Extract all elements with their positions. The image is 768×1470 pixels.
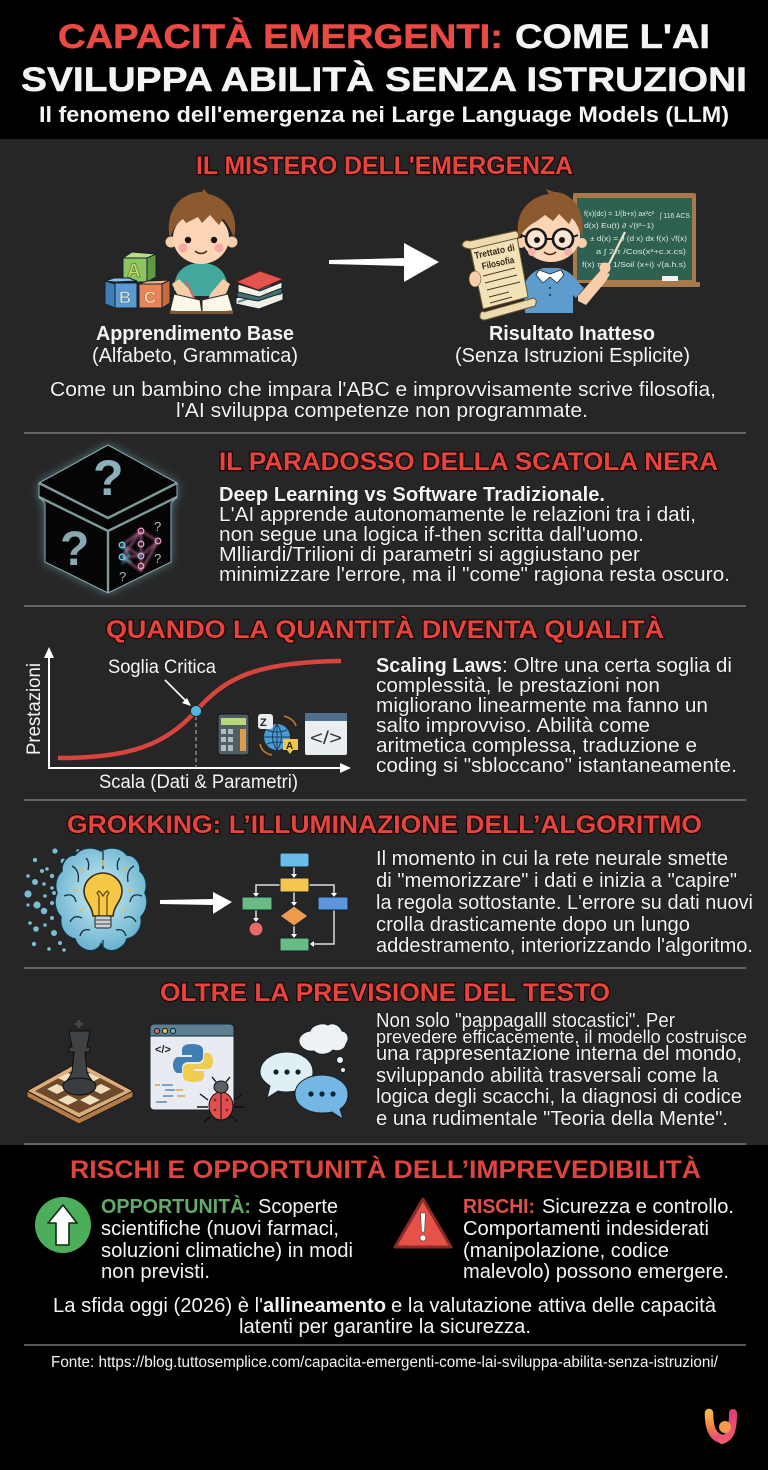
text block: [376, 847, 753, 957]
panel: grokking: [24, 811, 753, 957]
illustration: chalkboard teacher with scroll: f(x) π = 1/Soil (x+i) √(a.h.s): [582, 261, 686, 269]
icon: warning triangle: [395, 1199, 451, 1247]
illustration: chalkboard teacher with scroll: Trettato di: [473, 242, 516, 262]
arrow head: [182, 698, 191, 706]
text block: : Oltre una certa soglia di: [502, 654, 732, 677]
icon: black box: ?: [119, 569, 126, 584]
closing statement: [53, 1294, 717, 1338]
icon: black box: [39, 445, 177, 593]
icon: thought and speech bubbles: [260, 1024, 348, 1119]
arrow: [329, 243, 439, 282]
arrow: [160, 892, 232, 914]
logo: [709, 1413, 733, 1440]
icon: code window: </>: [310, 728, 342, 748]
threshold label: Soglia Critica: [108, 657, 216, 678]
opportunity text: [101, 1195, 353, 1283]
threshold arrow: [165, 680, 188, 703]
closing statement: latenti per garantire la sicurezza.: [239, 1315, 531, 1338]
heading: IL PARADOSSO DELLA SCATOLA NERA: [219, 448, 718, 476]
text block: salto improvviso. Abilità come: [376, 714, 650, 737]
panel: il paradosso della scatola nera: [39, 445, 730, 593]
panel: quando la quantità diventa qualità: [24, 615, 737, 793]
label: apprendimento base: (Alfabeto, Grammatica): [92, 345, 298, 367]
icon: black box: ?: [154, 519, 161, 534]
illustration: chalkboard teacher with scroll: ± d(x) = ∂ (d x) dx f(x) √f(x): [590, 235, 687, 243]
performance curve: [58, 661, 341, 758]
text block: [219, 483, 730, 586]
header: [0, 0, 768, 139]
icon: code window: [305, 713, 347, 755]
risks text: (manipolazione, codice: [463, 1239, 669, 1262]
panel: il mistero dell'emergenza: [50, 152, 716, 422]
text block: logica degli scacchi, la diagnosi di codice: [376, 1085, 742, 1108]
icon: flowchart: [242, 853, 348, 951]
text block: non segue una logica if-then scritta dall'uomo.: [219, 523, 644, 546]
icon: code window with python logo and bug: [150, 1024, 245, 1122]
illustration: chalkboard teacher with scroll: Filosofia: [481, 255, 516, 272]
illustration: child learning: C: [144, 288, 156, 307]
icon: chess board and king: [27, 1020, 133, 1124]
axes: [49, 655, 343, 768]
chart: scaling curve: [24, 647, 351, 793]
label: risultato inatteso: Risultato Inatteso: [489, 323, 655, 345]
closing statement: e la valutazione attiva delle capacità: [391, 1294, 717, 1317]
closing statement: allineamento: [263, 1294, 386, 1317]
illustration: child learning: A: [127, 261, 141, 282]
icon: black box: ?: [154, 551, 161, 566]
text block: di "memorizzare" i dati e inizia a "capire": [376, 869, 737, 892]
subtitle: Il fenomeno dell'emergenza nei Large Language Models (LLM): [39, 102, 729, 127]
icon: translation globe: Z: [260, 717, 267, 729]
icon: translation globe: A: [286, 741, 293, 752]
text block: addestramento, interiorizzando l'algoritmo.: [376, 934, 753, 957]
icon: black box: ?: [60, 523, 89, 576]
risks text: RISCHI:: [463, 1195, 535, 1218]
text block: sviluppando abilità trasversali come la: [376, 1064, 719, 1087]
text block: crolla drasticamente dopo un lungo: [376, 913, 690, 936]
risks text: Comportamenti indesiderati: [463, 1217, 709, 1240]
text block: [376, 654, 737, 777]
panel: rischi e opportunità: [0, 1144, 768, 1470]
risks text: [463, 1195, 734, 1283]
text block: una rappresentazione interna del mondo,: [376, 1042, 742, 1065]
label: apprendimento base: [92, 323, 298, 367]
neural network: [122, 531, 158, 571]
heading: QUANDO LA QUANTITÀ DIVENTA QUALITÀ: [106, 615, 664, 644]
chalkboard: [573, 193, 696, 283]
opportunity text: Scoperte: [258, 1195, 338, 1218]
text block: complessità, le prestazioni non: [376, 674, 660, 697]
text block: e una rudimentale "Teoria della Mente".: [376, 1107, 728, 1130]
icon: black box: ?: [93, 450, 124, 506]
text block: Scaling Laws: [376, 654, 502, 677]
panel: oltre la previsione del testo: [27, 979, 747, 1130]
head: [516, 238, 526, 248]
opportunity text: scientifiche (nuovi farmaci,: [101, 1217, 339, 1240]
text block: prevedere efficacemente, il modello costruisce: [376, 1026, 747, 1047]
text block: L'AI apprende autonomamente le relazioni tra i dati,: [219, 503, 696, 526]
text block: [376, 1009, 747, 1130]
title line 1 white: COME L'AI: [515, 18, 710, 56]
icon: translation globe: [258, 714, 298, 755]
text block: Deep Learning vs Software Tradizionale.: [219, 483, 605, 506]
risks text: Sicurezza e controllo.: [542, 1195, 734, 1218]
text block: Non solo "pappagalll stocastici". Per: [376, 1009, 675, 1032]
icon: calculator: [218, 714, 249, 755]
illustration: chalkboard teacher with scroll: f(x)(dc) = 1/(b+x) ax²c²: [584, 211, 655, 218]
illustration: chalkboard teacher with scroll: ʃ 116 ACS: [659, 213, 690, 220]
pointer: [608, 232, 625, 266]
threshold marker: [190, 706, 202, 716]
closing statement: La sfida oggi (2026) è l': [53, 1294, 263, 1317]
body: [524, 268, 584, 313]
icon: brain with light bulb: [24, 848, 147, 954]
opportunity text: non previsti.: [101, 1260, 210, 1283]
opportunity text: soluzioni climatiche) in modi: [101, 1239, 353, 1262]
x axis label: Scala (Dati & Parametri): [99, 772, 298, 793]
title line 1 red: CAPACITÀ EMERGENTI:: [58, 18, 503, 56]
text block: Il momento in cui la rete neurale smette: [376, 847, 728, 870]
illustration: child learning: [105, 189, 283, 314]
text block: Mlliardi/Trilioni di parametri si aggiustano per: [219, 543, 640, 566]
heading: IL MISTERO DELL'EMERGENZA: [196, 152, 573, 180]
text block: aritmetica complessa, traduzione e: [376, 734, 697, 757]
title line 2: SVILUPPA ABILITÀ SENZA ISTRUZIONI: [21, 61, 747, 99]
opportunity text: OPPORTUNITÀ:: [101, 1195, 251, 1218]
text block: migliorano linearmente ma fanno un: [376, 694, 708, 717]
text block: la regola sottostante. L'errore su dati nuovi: [376, 891, 753, 914]
scroll: [470, 237, 528, 309]
head: [166, 236, 176, 248]
text block: l'AI sviluppa competenze non programmate.: [176, 399, 588, 422]
text block: Come un bambino che impara l'ABC e improvvisamente scrive filosofia,: [50, 378, 716, 401]
text block: [50, 378, 716, 422]
label: risultato inatteso: [455, 323, 690, 367]
label: risultato inatteso: (Senza Istruzioni Esplicite): [455, 345, 690, 367]
risks text: malevolo) possono emergere.: [463, 1260, 729, 1283]
text block: minimizzare l'errore, ma il "come" ragiona resta oscuro.: [219, 563, 730, 586]
text block: coding si "sbloccano" istantaneamente.: [376, 754, 737, 777]
books: [236, 289, 283, 309]
illustration: chalkboard teacher with scroll: [462, 189, 700, 320]
illustration: chalkboard teacher with scroll: d(x) Eu(t) ∂ √(t²−1): [584, 222, 654, 230]
y axis label: Prestazioni: [24, 663, 45, 755]
threshold dashed line: [195, 716, 197, 768]
label: apprendimento base: Apprendimento Base: [96, 323, 294, 345]
heading: GROKKING: L’ILLUMINAZIONE DELL’ALGORITMO: [67, 811, 702, 839]
body: [174, 263, 228, 296]
illustration: chalkboard teacher with scroll: a ∫ 2π /Cos(x²+c.x.cs): [596, 249, 686, 256]
icon: opportunity arrow: [35, 1197, 91, 1253]
source: Fonte: https://blog.tuttosemplice.com/capacita-emergenti-come-lai-sviluppa-abilita-senza-istruzioni/: [51, 1354, 719, 1371]
lid and edges: [39, 483, 177, 593]
icon: code window with python logo and bug: </>: [155, 1044, 171, 1056]
heading: OLTRE LA PREVISIONE DEL TESTO: [160, 979, 610, 1007]
illustration: child learning: B: [119, 288, 131, 307]
heading: RISCHI E OPPORTUNITÀ DELL’IMPREVEDIBILITÀ: [70, 1155, 701, 1184]
